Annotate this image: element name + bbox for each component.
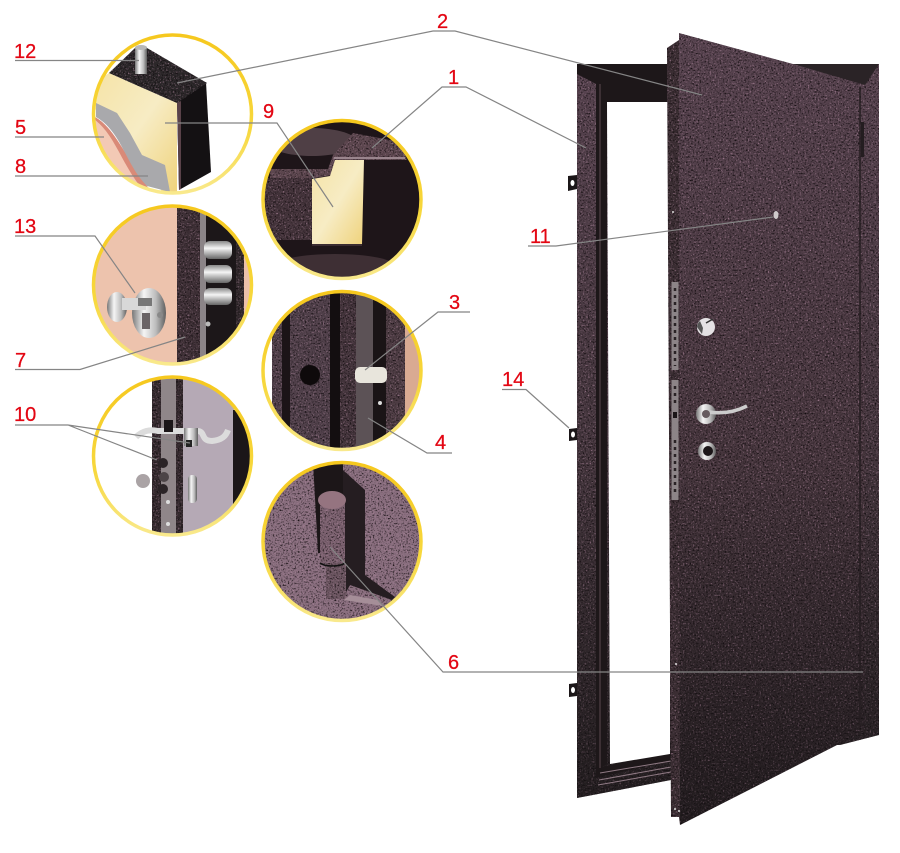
callout 5 — [15, 117, 104, 139]
callout 3: 3 — [449, 292, 460, 314]
callout 3 — [365, 292, 470, 370]
callout 1 — [372, 67, 586, 148]
callout 4: 4 — [435, 432, 446, 454]
callout 10: 10 — [14, 404, 36, 426]
callout 12: 12 — [14, 41, 36, 63]
callout 11 — [528, 217, 773, 248]
handle — [696, 404, 747, 424]
callout 6: 6 — [448, 652, 459, 674]
callout 10 — [14, 404, 190, 460]
callout 6 — [330, 547, 863, 674]
callout 8 — [15, 156, 148, 178]
circle inset: hinge — [262, 462, 422, 622]
circle inset: frame section with insulation — [263, 120, 421, 278]
callout 13: 13 — [14, 216, 36, 238]
door leaf — [667, 33, 865, 825]
callout 5: 5 — [15, 117, 26, 139]
door opening — [607, 102, 670, 764]
bolts — [204, 241, 232, 326]
callout 12 — [14, 41, 139, 63]
key and rosette — [107, 288, 166, 338]
peephole — [774, 211, 778, 219]
lower lock — [698, 442, 716, 460]
circle inset: lock strip and handle — [94, 376, 253, 536]
circle inset: door section — [90, 35, 252, 200]
callout 14 — [502, 369, 569, 428]
callout 7: 7 — [15, 350, 26, 372]
callout 4 — [368, 418, 452, 454]
callout 11: 11 — [530, 226, 551, 248]
callout 7 — [15, 337, 185, 372]
callout 2: 2 — [437, 11, 448, 33]
callout 13 — [14, 216, 135, 293]
callout 9: 9 — [263, 101, 274, 123]
circle inset: anti-removal pin — [263, 291, 425, 451]
frame anchor tabs — [568, 175, 577, 697]
callout 8: 8 — [15, 156, 26, 178]
callout 9 — [165, 101, 333, 207]
upper cylinder — [697, 318, 715, 336]
callout 14: 14 — [502, 369, 524, 391]
callout 2 — [177, 11, 702, 95]
handle — [136, 428, 228, 447]
door frame — [577, 64, 879, 798]
circle inset: lock and bolts — [93, 205, 252, 365]
callout 1: 1 — [448, 67, 459, 89]
lock strips — [672, 282, 678, 500]
